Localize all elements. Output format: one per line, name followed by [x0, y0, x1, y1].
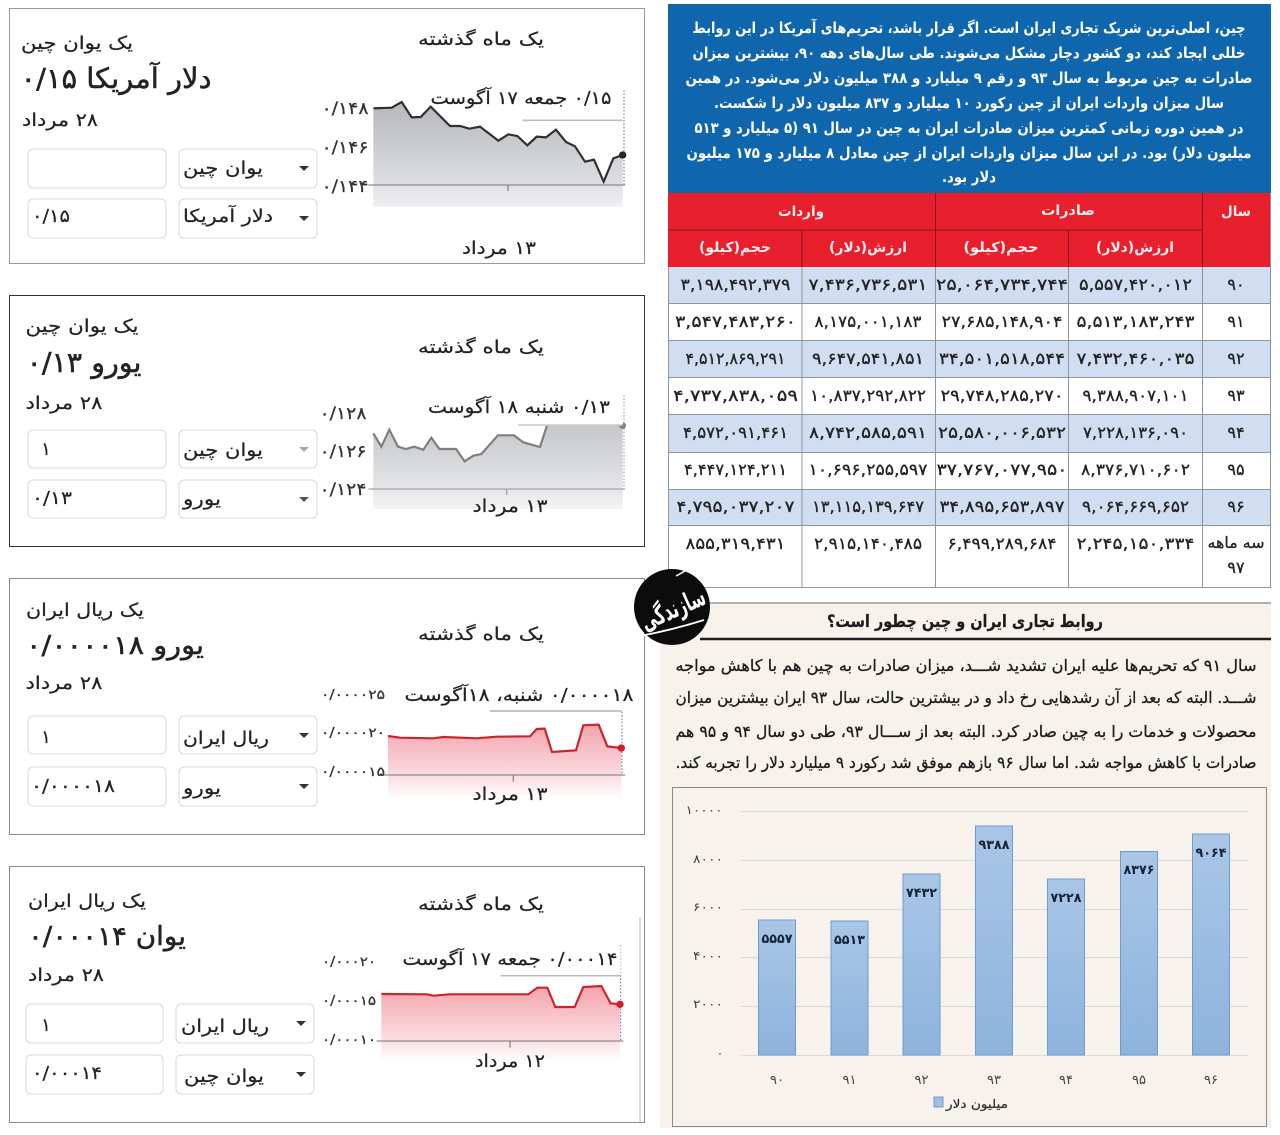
table rows: ۹۵: [1227, 460, 1245, 479]
table rows: ۹۶: [1227, 497, 1245, 516]
text: date: ۲۸ مرداد: [28, 965, 104, 986]
panel: yuan to US dollar: [10, 8, 644, 264]
table rows: ۷,۴۳۲,۴۶۰,۰۳۵: [1076, 349, 1194, 368]
table rows: ۷,۲۲۸,۱۳۶,۰۹۰: [1083, 423, 1188, 442]
table rows: ۸,۷۴۲,۵۸۵,۵۹۱: [809, 423, 927, 442]
converter form: ۰/۱۳: [32, 488, 72, 509]
x axis labels: ۹۲: [915, 1073, 928, 1088]
table rows: ۱۰,۶۹۶,۲۵۵,۵۹۷: [808, 460, 928, 479]
text: article body: صادرات با کاهش مواجه شد. اما سال ۹۶ بازهم موفق شد رکورد ۹ میلیارد دلار را تجربه کند.: [676, 753, 1256, 773]
line chart: last month: [322, 86, 626, 259]
legend: [934, 1097, 1008, 1112]
x axis labels: ۹۴: [1059, 1073, 1073, 1088]
converter form: دلار آمریکا: [183, 204, 273, 227]
text: article body: محصولات و خدمات را به چین صادر کرد. البته بعد از ســـال ۹۳، طی دو سال ۹۴ و ۹۵ هم: [676, 722, 1256, 742]
table: Iran-China trade by year: [668, 193, 1271, 588]
bar chart: exports in million dollars: [672, 788, 1266, 1126]
table rows: ۳۴,۵۰۱,۵۱۸,۵۴۴: [939, 349, 1065, 368]
table header: حجم(کیلو): [699, 240, 771, 256]
y axis labels: [686, 803, 723, 1060]
panel: rial to yuan: [10, 866, 644, 1122]
converter form: ریال ایران: [183, 728, 269, 749]
table rows: ۸,۱۷۵,۰۰۱,۱۸۳: [814, 312, 922, 331]
converter form: ۱: [41, 439, 51, 460]
text: date: ۲۸ مرداد: [26, 393, 103, 414]
x axis labels: ۹۵: [1132, 1073, 1146, 1088]
bar values: ۹۰۶۴: [1196, 846, 1227, 861]
line chart: last month: ۰/۰۰۰۱۰: [322, 1033, 376, 1048]
table rows: ۹۲: [1227, 349, 1245, 368]
text: one Iranian rial: یک ریال ایران: [26, 600, 144, 621]
table rows: ۷,۴۳۶,۷۳۶,۵۳۱: [808, 275, 928, 294]
table header: واردات: [778, 204, 824, 220]
table rows: ۳,۱۹۸,۴۹۲,۳۷۹: [680, 275, 790, 294]
text: article body: سال ۹۱ که تحریم‌ها علیه ایران تشدید شـــد، میزان صادرات به چین هم با کاهش مواجه: [675, 656, 1256, 676]
text: one Chinese yuan: یک یوان چین: [26, 316, 138, 337]
table rows: ۹,۰۶۴,۶۶۹,۶۵۲: [1082, 497, 1189, 516]
converter form: ۰/۰۰۰۱۴: [32, 1063, 102, 1084]
line chart: last month: ۱۳ مرداد: [462, 238, 536, 259]
table rows: ۴,۴۴۷,۱۲۴,۲۱۱: [684, 460, 787, 479]
converter form: یوان چین: [183, 158, 263, 179]
table rows: ۸۵۵,۳۱۹,۴۳۱: [686, 534, 786, 553]
bars: [758, 826, 1230, 1055]
heading: article title: روابط تجاری ایران و چین چطور است؟: [827, 612, 1103, 632]
table header: صادرات: [1041, 203, 1095, 219]
heading: rate in US dollars: دلار آمریکا ۰/۱۵: [21, 62, 212, 95]
text: date: ۲۸ مرداد: [22, 110, 98, 131]
converter form: ریال ایران: [181, 1016, 269, 1037]
table rows: ۲,۹۱۵,۱۴۰,۴۸۵: [814, 534, 922, 553]
table rows: ۱۰,۸۳۷,۲۹۲,۸۲۲: [810, 386, 926, 405]
heading: rate in yuan: یوان ۰/۰۰۰۱۴: [28, 922, 186, 952]
text: chart period: یک ماه گذشته: [418, 28, 544, 50]
table rows: ۵,۵۱۳,۱۸۳,۲۴۳: [1076, 312, 1195, 331]
x axis labels: ۹۶: [1204, 1073, 1218, 1088]
panel: yuan to euro: [10, 296, 644, 546]
line chart: last month: ۱۳ مرداد: [472, 784, 548, 805]
legend: میلیون دلار: [945, 1097, 1008, 1112]
table rows: ۹,۶۴۷,۵۴۱,۸۵۱: [812, 349, 924, 368]
line chart: last month: ۰/۱۲۶: [320, 442, 366, 462]
line chart: last month: ۰/۱۲۴: [320, 480, 366, 500]
line chart: last month: ۰/۱۴۴: [322, 177, 368, 197]
line chart: last month: ۰/۰۰۰۰۲۵: [321, 688, 385, 703]
logo: Sazandegi: سازندگی: [636, 581, 710, 637]
table rows: ۳۴,۸۹۵,۶۵۳,۸۹۷: [940, 497, 1065, 516]
table rows: ۹۰: [1227, 275, 1245, 294]
converter form: [28, 430, 317, 518]
table header: ارزش(دلار): [829, 240, 907, 256]
y axis labels: ۴۰۰۰: [693, 949, 723, 963]
table header: [668, 193, 1271, 267]
line chart: last month: ۱۲ مرداد: [475, 1051, 545, 1072]
x axis labels: ۹۰: [770, 1073, 784, 1088]
y axis labels: ۰: [717, 1046, 723, 1060]
table rows: ۱۳,۱۱۵,۱۳۹,۶۴۷: [812, 497, 924, 516]
panel: blue intro text: سال میزان واردات ایران از چین رکورد ۱۰ میلیارد و ۸۳۷ میلیون دلار را شکست.: [714, 94, 1224, 113]
line chart: last month: ۱۳ مرداد: [472, 496, 548, 517]
converter form: [28, 149, 317, 238]
converter form: ۰/۰۰۰۰۱۸: [31, 776, 115, 797]
table rows: ۲,۲۴۵,۱۵۰,۳۳۴: [1076, 534, 1194, 553]
y axis labels: ۶۰۰۰: [693, 900, 723, 914]
table header: سال: [1221, 204, 1251, 220]
table rows: ۳۷,۷۶۷,۰۷۷,۹۵۰: [936, 460, 1068, 479]
bar values: ۵۵۵۷: [762, 932, 793, 947]
table rows: ۲۷,۶۸۵,۱۴۸,۹۰۴: [942, 312, 1062, 331]
table rows: ۳,۵۴۷,۴۸۳,۲۶۰: [675, 312, 796, 331]
x axis labels: ۹۳: [987, 1073, 1001, 1088]
text: chart period: یک ماه گذشته: [418, 623, 544, 645]
text: article body: [675, 656, 1256, 773]
line chart: last month: ۰/۱۴۸: [322, 99, 368, 119]
line chart: last month: ۰/۱۳ شنبه ۱۸ آگوست: [428, 395, 610, 418]
table rows: ۲۵,۵۸۰,۰۰۶,۵۳۲: [938, 423, 1066, 442]
converter form: یورو: [182, 489, 221, 510]
line chart: last month: ۰/۰۰۰۰۲۰: [321, 726, 385, 741]
line chart: last month: ۰/۰۰۰۱۵: [322, 994, 376, 1009]
table rows: ۹۷: [1227, 558, 1245, 577]
heading: rate in euros: یورو ۰/۱۳: [26, 346, 142, 379]
converter form: ۱: [41, 1015, 51, 1036]
panel: blue intro text: دلار بود.: [942, 168, 996, 186]
table rows: ۲۹,۷۴۸,۲۸۵,۲۷۰: [940, 386, 1064, 405]
table rows: ۹,۳۸۸,۹۰۷,۱۰۱: [1082, 386, 1188, 405]
x axis labels: [770, 1073, 1218, 1088]
bar values: ۸۳۷۶: [1124, 863, 1154, 878]
y axis labels: ۲۰۰۰: [693, 997, 723, 1011]
table rows: ۹۴: [1227, 423, 1245, 442]
panel: rial to euro: [10, 578, 644, 834]
bar values: ۷۴۳۲: [906, 886, 937, 901]
bar values: ۵۵۱۳: [834, 933, 865, 948]
bar values: ۷۲۲۸: [1050, 891, 1082, 906]
table header: حجم(کیلو): [964, 240, 1038, 256]
table rows: ۴,۷۳۷,۸۳۸,۰۵۹: [673, 386, 798, 405]
panel: blue intro text: صادرات به چین مربوط به سال ۹۳ و رقم ۹ میلیارد و ۳۸۸ میلیون دلار می‌شود. در همین: [686, 69, 1252, 88]
table rows: ۴,۵۷۲,۰۹۱,۴۶۱: [683, 423, 788, 442]
x axis labels: ۹۱: [843, 1073, 856, 1088]
table rows: ۲۵,۰۶۴,۷۳۴,۷۴۴: [936, 275, 1068, 294]
converter form: یوان چین: [184, 1066, 264, 1087]
text: one Iranian rial: یک ریال ایران: [28, 891, 146, 912]
converter form: ۱: [41, 727, 51, 748]
table rows: ۹۱: [1227, 312, 1245, 331]
table rows: سه ماهه: [1208, 533, 1264, 552]
line chart: last month: [322, 945, 624, 1072]
text: one Chinese yuan: یک یوان چین: [21, 33, 133, 54]
converter form: ۰/۱۵: [32, 206, 70, 227]
table rows: ۵,۵۵۷,۴۲۰,۰۱۲: [1079, 275, 1192, 294]
text: article body: شـــد. البته که بعد از آن رشدهایی رخ داد و در بیشترین حالت، سال ۹۳ ایران بیشترین میزان: [676, 688, 1256, 708]
table rows: ۹۳: [1227, 386, 1245, 405]
line chart: last month: ۰/۱۲۸: [320, 404, 366, 424]
line chart: last month: ۰/۰۰۰۲۰: [322, 955, 376, 970]
line chart: last month: ۰/۰۰۰۰۱۸ شنبه، ۱۸آگوست: [404, 683, 634, 706]
panel: trade relations article: [660, 603, 1271, 1128]
table rows: [668, 193, 1271, 588]
line chart: last month: ۰/۰۰۰۰۱۵: [321, 765, 385, 780]
converter form: [26, 1004, 314, 1094]
line chart: last month: ۰/۰۰۰۱۴ جمعه ۱۷ آگوست: [402, 947, 618, 970]
y axis labels: ۱۰۰۰۰: [686, 803, 722, 817]
bar values: ۹۳۸۸: [978, 838, 1010, 853]
panel: blue intro text: [668, 4, 1271, 193]
table rows: ۸,۳۷۶,۷۱۰,۶۰۲: [1081, 460, 1190, 479]
text: date: ۲۸ مرداد: [26, 673, 103, 694]
y axis labels: ۸۰۰۰: [693, 852, 723, 866]
table rows: ۴,۷۹۵,۰۳۷,۲۰۷: [676, 497, 795, 516]
text: chart period: یک ماه گذشته: [418, 336, 544, 358]
heading: rate in euros: یورو ۰/۰۰۰۰۱۸: [26, 631, 204, 661]
table rows: ۴,۵۱۲,۸۶۹,۲۹۱: [686, 349, 786, 368]
line chart: last month: ۰/۱۴۶: [322, 138, 368, 158]
logo: Sazandegi: [634, 566, 710, 645]
line chart: last month: ۰/۱۵ جمعه ۱۷ آگوست: [430, 86, 612, 109]
converter form: یورو: [182, 778, 221, 799]
table header: ارزش(دلار): [1096, 240, 1174, 256]
text: chart period: یک ماه گذشته: [418, 893, 544, 915]
converter form: یوان چین: [183, 440, 263, 461]
bar values: [762, 838, 1227, 948]
converter form: [28, 716, 317, 806]
line chart: last month: [320, 394, 626, 517]
table rows: ۶,۴۹۹,۲۸۹,۶۸۴: [948, 534, 1056, 553]
line chart: last month: [321, 680, 634, 805]
